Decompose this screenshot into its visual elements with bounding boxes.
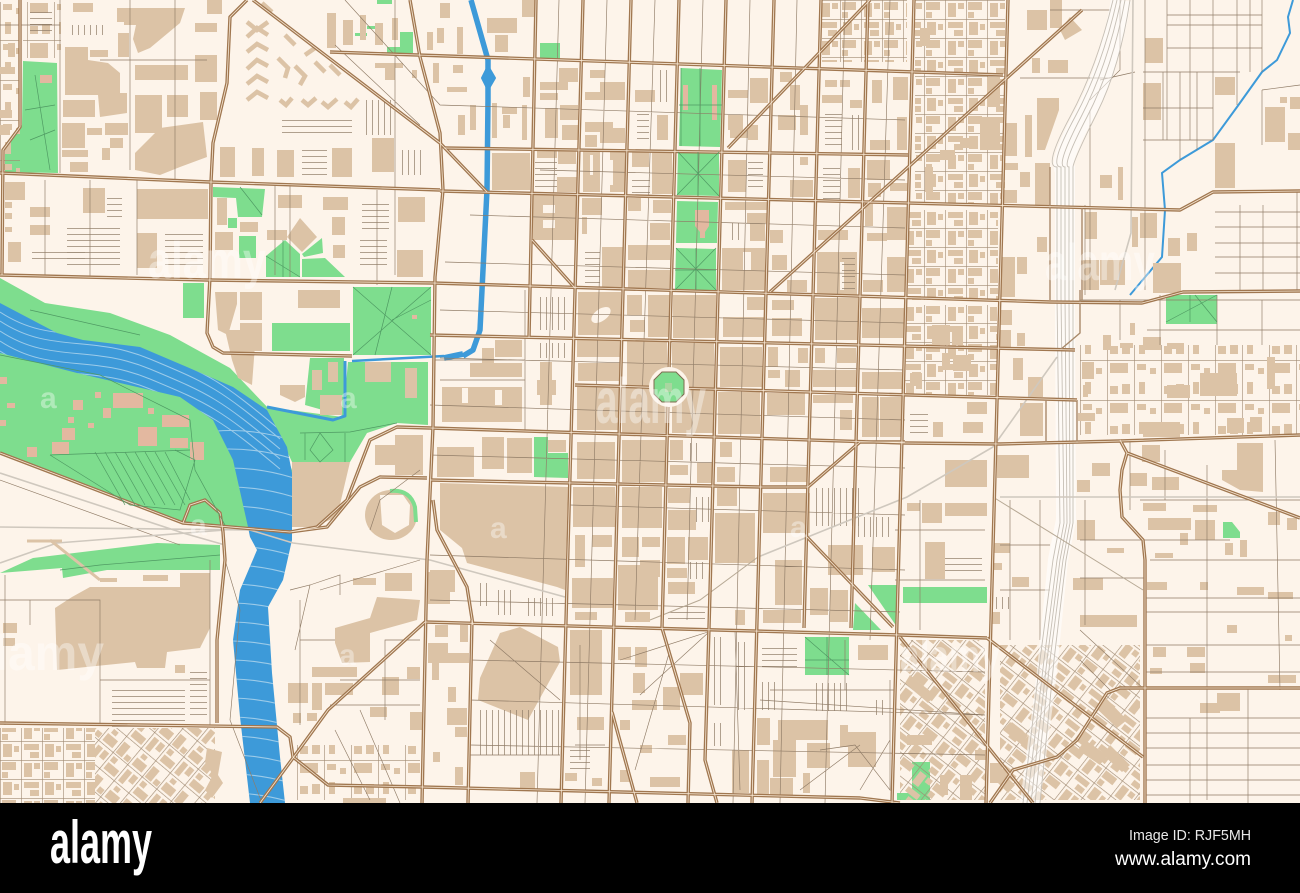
- downtown blocks: [430, 68, 908, 625]
- watermark: lower right alamy: alamy: [900, 630, 1000, 682]
- website: www.alamy.com: [1114, 849, 1251, 870]
- canal: [267, 0, 495, 420]
- parking stripes: [30, 10, 1009, 770]
- watermark: scattered letters: a: [190, 509, 207, 542]
- river wave lines: [0, 312, 300, 805]
- east side buildings: [907, 0, 1300, 590]
- watermark: scattered letters: a: [339, 639, 356, 672]
- apartment chevrons: [247, 3, 358, 107]
- watermark: scattered letters: a: [790, 511, 807, 544]
- watermark: centre alamy: alamy: [596, 365, 706, 437]
- watermark: scattered letters: a: [340, 382, 357, 415]
- image id: Image ID: RJF5MH: [1129, 827, 1251, 844]
- creek: [1130, 0, 1293, 295]
- south side buildings: [430, 577, 1296, 800]
- minor double roads: [1046, 167, 1082, 443]
- watermark: scattered letters: [40, 382, 807, 672]
- park paths: [0, 68, 1217, 675]
- watermark: upper left alamy: alamy: [148, 232, 266, 290]
- watermark: upper right alamy: alamy: [1045, 234, 1155, 292]
- stadium baseball: [365, 490, 417, 540]
- watermark: scattered letters: a: [40, 382, 57, 415]
- footer bar: [0, 803, 1300, 893]
- monument circle: [649, 367, 689, 407]
- railway white corridor: [1030, 0, 1121, 803]
- building footprints: [0, 0, 535, 277]
- west and south-west buildings: [3, 290, 450, 803]
- park buildings: [0, 75, 717, 460]
- watermark: scattered letters: a: [490, 512, 507, 545]
- watermarks: [0, 232, 1155, 682]
- alamy logo: alamy: [50, 809, 152, 876]
- cream cut-outs inside blocks: [462, 155, 844, 405]
- river: [0, 303, 300, 805]
